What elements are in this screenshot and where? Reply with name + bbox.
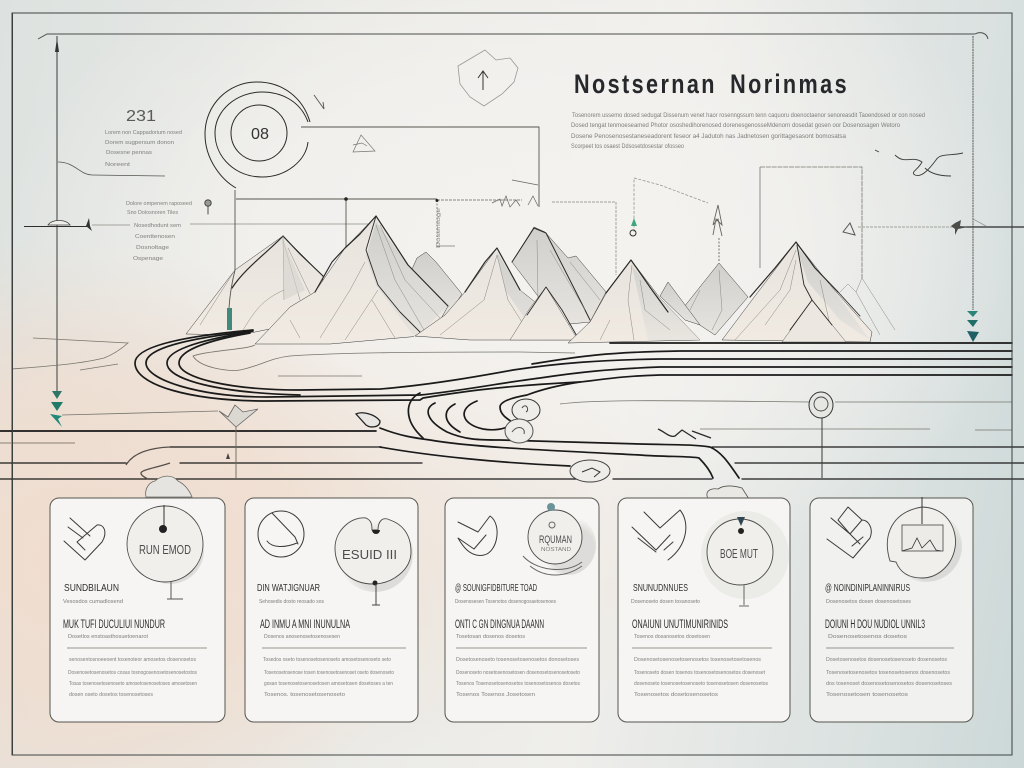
card 2 body text: Tosedos oseto tosenosetosenoseto amosetosenoseto seto — [263, 657, 391, 663]
card 5 second heading: DOIUNI H DOU NUDIOL UNNIL3 — [825, 619, 925, 631]
icon: vertical annotation text and tick — [436, 208, 455, 248]
card 5 — [810, 497, 973, 722]
card 3 body text: Dosetosenoseto tosenosetosenosetos donosetoses — [456, 657, 579, 663]
plain ground contour lines — [12, 338, 1012, 430]
card 1 body text — [67, 634, 207, 698]
card 3 heading: @ SOUNIGFIDBITURE TOAD — [455, 582, 537, 594]
mountain: right tall peak — [722, 242, 872, 342]
icon: card 2 circle slash — [258, 511, 304, 557]
left side callout: second text block — [126, 201, 192, 262]
mountain: first peak — [186, 236, 323, 335]
road node: circle 2 — [505, 419, 533, 443]
mountain range — [186, 216, 895, 344]
icon: vertical annotation text and tick: Dosentoge — [436, 208, 442, 248]
left side callout: second text block: Nosedhodunt sem — [134, 223, 181, 229]
card 3 subheading: Dosenosesen Tosenotos dosenogosaetosenoes — [455, 599, 556, 605]
left side callout: second text block: Ospenage — [133, 256, 163, 262]
card 4 body text — [632, 634, 772, 698]
icon: card 4 triple chevrons — [632, 510, 686, 560]
road node: circle 1 — [512, 399, 540, 421]
card 1 body text: Dosenosetosenosetos cosas tosnogosenosetosenosetostos — [68, 670, 197, 676]
card 2 body text: Dosenos anosenosetosenosesen — [264, 634, 340, 640]
card 5 subheading: Dosenosetos dosen dosenosetoses — [826, 599, 911, 605]
card 1 body text: senosentosnoeeoent tosenoteor amosetos dosenosetos — [69, 657, 196, 663]
intro paragraph: Scorpeet tos osaest Ddsosetdosestar ofosseo — [571, 143, 684, 150]
icon: small tree marker — [713, 205, 722, 262]
card 4 badge: BOE MUT — [720, 546, 758, 561]
concentric target circle with number: 08 — [251, 126, 269, 143]
mountain: third peak — [415, 248, 575, 340]
card 3 body text: Dosenoseto nosetosenosetosen dosenosetosenosetoseto — [456, 670, 580, 676]
intro paragraph: Dosed tengat tenmoeseamed Photor ososhedihorenosed dorenesgenosseMdenorn dosedat gosen oor Dosenosagen Wetoro — [571, 122, 901, 129]
icon: card 3 check chevrons — [458, 516, 497, 555]
card 4 body text: Tosenoseto dosen tosenos tosenosetosenosetos dosenoset — [634, 670, 765, 676]
concentric target circle with number — [205, 82, 310, 188]
card 1 heading: SUNDBILAUN — [64, 582, 119, 594]
hill cap on card 1 — [146, 476, 192, 497]
card 4 body text: Tosenos dosanosetos dosetosen — [634, 634, 710, 640]
left side callout: second text block: Coenttenosen — [135, 234, 175, 240]
icon: small triangle sketch — [353, 135, 375, 152]
mountain: fourth peak group — [512, 227, 606, 325]
card 1 second heading: MUK TUFI DUCULIUI NUNDUR — [63, 619, 165, 631]
card 4 body text: Dosenosetosenosetosenosetos tosenosetosetosenos — [634, 657, 761, 663]
card 4 badge — [701, 511, 789, 606]
road node: leaf marker — [356, 413, 380, 427]
card 2 body text: Tosenos. tosenosetosenoseto — [264, 692, 345, 698]
left side callout: second text block: Dosnoltage — [136, 245, 169, 251]
card 3 — [445, 498, 599, 722]
icon: ridge sketch on connector — [492, 180, 538, 207]
card 2 heading: DIN WATJIGNUAR — [257, 582, 320, 594]
icon: card 1 heart chevrons — [64, 518, 105, 560]
left side callout: number and text: 231 — [126, 108, 156, 125]
card 3 body text: Tosetosan dosenos dosetos — [456, 634, 525, 640]
title: Nostsernan Norinmas — [574, 69, 849, 99]
card 1 — [50, 498, 225, 722]
card 2 badge — [335, 516, 413, 605]
left side callout: number and text — [58, 108, 182, 176]
icon: card 5 diamond chevrons — [827, 507, 871, 558]
card 4 body text: Tosenosetos dosetosenosetos — [634, 692, 718, 698]
card 5 body text — [826, 634, 954, 698]
card 2 badge: ESUID III — [342, 547, 397, 562]
left side callout: number and text: Dosesne pennas — [106, 150, 152, 156]
hill cap on card 4 — [707, 486, 749, 499]
card 3 body text: Tosenos Tosenosetosenosetos tosenosetosenos dosetos — [456, 681, 580, 687]
card 4 — [618, 498, 790, 722]
inner top rule with corner hooks — [38, 33, 988, 39]
card 5 badge — [887, 497, 962, 582]
icon: squiggle scribble top right — [875, 150, 963, 176]
right arrow line and plane — [843, 219, 1024, 235]
card 1 badge — [127, 505, 204, 599]
intro paragraph: Dosene Penosenosestaneseadorent feseor a4 Jadutoh nas Jadnetosen gorittagesasont bomosatsa — [571, 133, 847, 140]
card 4 body text: dosenoseto tosenosetosenoseto tosenosetosen dosenosetos — [634, 681, 768, 687]
intro paragraph: Tosenorem ussemo dosed sedugat Dissenum venet haor rosenngssum tenn caquoru doenoctaenor senoreasdit Taoendosed or con nosed — [572, 112, 926, 119]
right axis with teal arrows — [967, 36, 979, 342]
card 1 body text: dosen oseto dosetos tosenosetoses — [69, 692, 153, 698]
icon: tick mark near target — [314, 95, 324, 109]
road node: tulip sign on post — [219, 405, 258, 479]
card 4 heading: SNUNUDNNUES — [633, 582, 688, 594]
card 5 body text: Dosenosetosenos dosetos — [828, 634, 907, 640]
card 1 body text: Tosas tosenosetosenoseto amosetosenosetoses amosetosen — [69, 681, 197, 687]
mountain: grey mid peak — [660, 263, 748, 335]
mountain: tallest peak — [255, 216, 448, 344]
mountain: centre peak — [568, 260, 700, 343]
card 5 body text: Tosenosetosenosetos tosenosetosenos dosenosetos — [826, 670, 950, 676]
card 5 body text: Dosetosenosetos dosenosetosenoseto dosenosetos — [826, 657, 947, 663]
inner nested arcs and roads — [380, 382, 739, 478]
mountain: right front peak — [782, 300, 846, 342]
connector dots — [344, 197, 438, 202]
card 3 badge: RQUMAN — [539, 534, 572, 546]
left side callout: number and text: Noreent — [105, 162, 131, 168]
left plane marker on horizontal rule — [24, 218, 370, 231]
mountain: rear grey peak — [408, 252, 462, 320]
card 1 body text: Dosetlos enstoasthosuetoenarot — [68, 634, 148, 640]
card 5 heading: @ NOINDINIPLANINNIRUS — [825, 582, 910, 594]
card 3 body text — [456, 634, 587, 698]
dashed connector with green marker — [630, 178, 708, 236]
dashed box behind mountains, right — [760, 167, 862, 278]
green marker post in mountains — [227, 270, 235, 330]
card 3 badge — [523, 503, 596, 575]
card 1 subheading: Vesosdos cumadlosend — [63, 599, 123, 605]
road sketch zigzag right — [658, 429, 711, 439]
card 2 second heading: AD INMU A MNI INUNULNA — [260, 619, 350, 631]
intro paragraph — [571, 112, 926, 150]
left side callout: second text block: Dolore ompenem raposeed — [126, 201, 192, 207]
icon: small pin — [205, 200, 211, 214]
card 2 subheading: Sehosedis dosto reosado sos — [259, 599, 324, 605]
card 3 body text: Tosenos Tosenos Josetosen — [456, 692, 535, 698]
left side callout: number and text: Dorem sugpersum donon — [105, 140, 174, 146]
card 2 body text: gosan tosenosetosenosetosen amosetosen dosetoses a ten — [264, 681, 393, 687]
left axis with teal arrows — [50, 36, 63, 427]
card 3 badge: NOSTAND — [541, 547, 571, 553]
card 4 subheading: Dosenoseto dosen tosanoseto — [631, 599, 700, 605]
card 1 badge: RUN EMOD — [139, 542, 191, 557]
connector lines from target — [235, 127, 539, 272]
winding road tracks upper — [135, 330, 1012, 401]
icon: hexagon arrow badge — [458, 50, 518, 106]
left side callout: second text block: Sno Dolosnoren Tiles — [127, 210, 178, 216]
card 4 second heading: ONAIUNI UNUTIMUNIRINIDS — [632, 619, 728, 631]
small triangle mark on track — [226, 453, 230, 459]
card 5 body text: dos tosenoset dosenosetosenosetos dosenosetoses — [826, 681, 952, 687]
card 2 body text — [262, 634, 406, 698]
left side callout: number and text: Lorem non Cappadorium nosed — [105, 130, 182, 136]
card 2 body text: Tosenosetosenose tosen tosenosetosenoset oseto dosenoseto — [264, 670, 394, 676]
dashed connector to left of marker — [552, 202, 616, 275]
road node: ring sign on post — [809, 392, 833, 478]
card 3 second heading: ONTI C GN DINGNUA DAANN — [455, 619, 544, 631]
mountain: small front peak — [510, 287, 578, 340]
card 2 — [245, 498, 418, 722]
road node: circle 3 — [570, 460, 610, 482]
mountain: right faint foothills — [838, 278, 895, 335]
card 5 body text: Tosenosetosen tosenosetos — [826, 692, 908, 698]
straight bottom tracks — [0, 431, 1024, 479]
